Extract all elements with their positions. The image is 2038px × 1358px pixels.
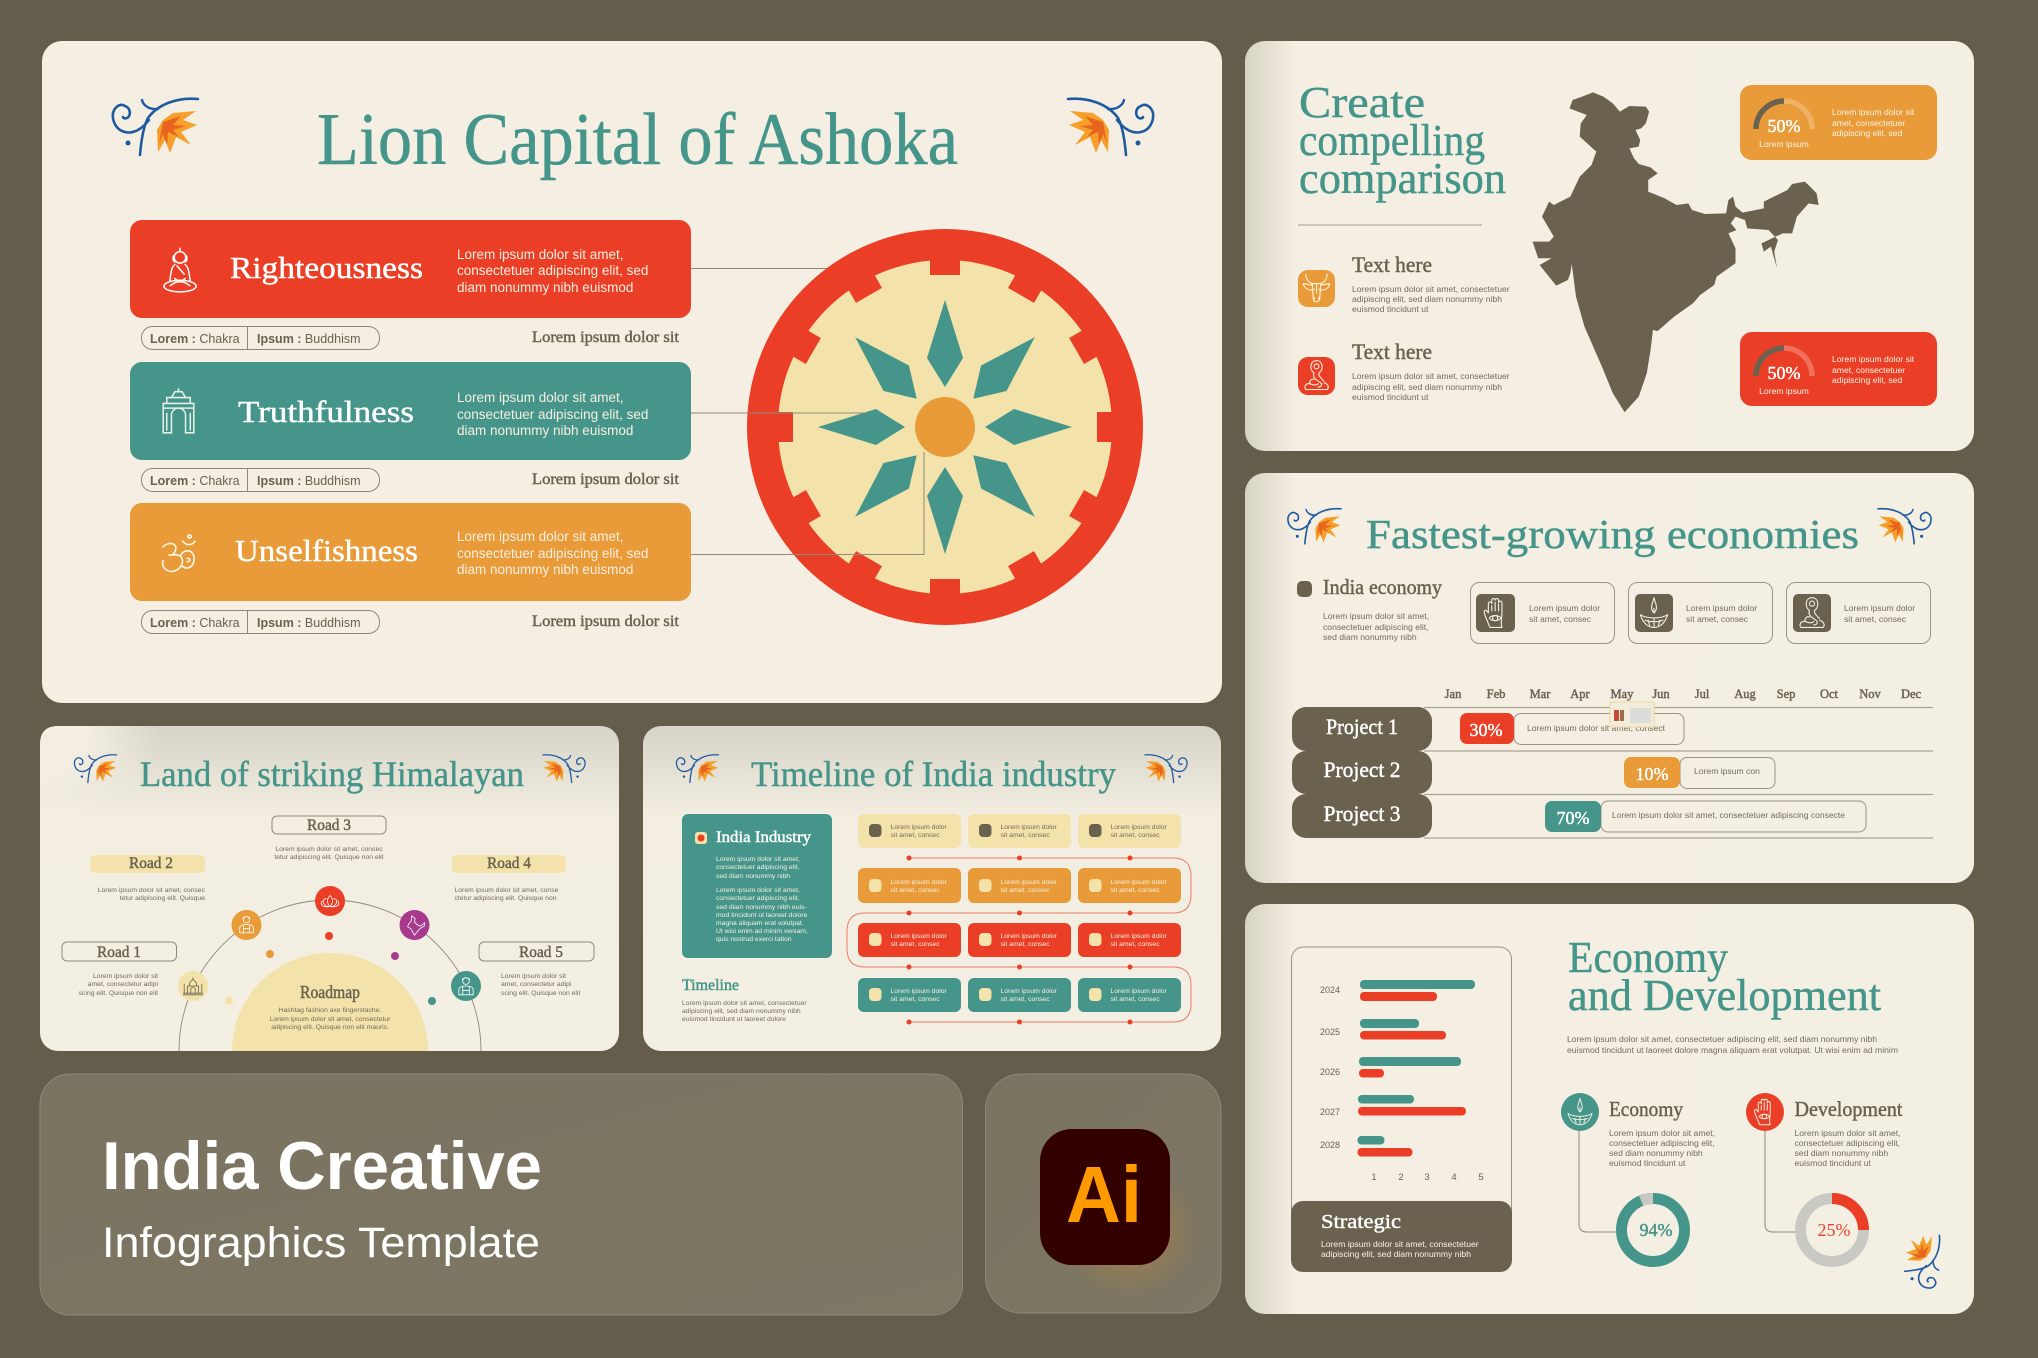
- card: cobra: sit amet, consec: [1844, 614, 1907, 624]
- economy block: Lorem ipsum dolor sit amet,: [1609, 1128, 1715, 1138]
- teal card: consectetuer adipiscing elit,: [716, 864, 800, 871]
- label: Road 5: amet, consectetur adipi: [501, 981, 572, 988]
- label: Road 4: [452, 855, 566, 902]
- heading: Create: [1299, 78, 1425, 127]
- gantt chart: [1292, 687, 1933, 838]
- bar: Truthfulness: consectetuer adipiscing elit, sed: [457, 407, 648, 422]
- bar chart card: Lorem ipsum dolor sit amet, consectetuer: [1321, 1239, 1479, 1249]
- panel: Economy and Development: [1245, 904, 1974, 1314]
- node: purple map: [400, 910, 430, 940]
- tag row 1: Ipsum : Buddhism: [257, 332, 361, 346]
- bar chart card: 2: [1398, 1172, 1404, 1183]
- teal card: Lorem ipsum dolor sit amet,: [716, 887, 800, 894]
- label: Road 3: Road 3: [307, 817, 351, 834]
- timeline row 1: Lorem ipsum dolor: [1110, 824, 1168, 831]
- teal card: sed diam nonummy nibh euis-: [716, 904, 807, 911]
- icon: left ornament: [676, 755, 718, 783]
- label: Road 4: Road 4: [487, 855, 531, 872]
- tag row 2: [142, 468, 680, 492]
- snake path: [847, 856, 1191, 1024]
- card: orange 50%: 50%: [1768, 116, 1800, 136]
- label: Road 2: [90, 855, 206, 902]
- teal card: India Industry: [716, 829, 811, 846]
- bar chart card: 1: [1371, 1172, 1377, 1183]
- label: Road 1: Road 1: [97, 944, 141, 961]
- teal card: [682, 814, 832, 958]
- gantt chart: 10%: [1636, 764, 1668, 784]
- timeline text: Timeline: [682, 977, 739, 994]
- timeline row 4: sit amet, consec: [1000, 996, 1050, 1003]
- tag row 3: Lorem : Chakra: [150, 616, 240, 630]
- timeline row 4: sit amet, consec: [890, 996, 940, 1003]
- bar: Righteousness: Righteousness: [230, 250, 423, 285]
- gantt chart: May: [1611, 687, 1634, 701]
- bar: Unselfishness: Lorem ipsum dolor sit amet,: [457, 529, 624, 544]
- gantt chart: Mar: [1530, 687, 1551, 701]
- timeline row 2: Lorem ipsum dolor: [1000, 879, 1058, 886]
- timeline row 2: Lorem ipsum dolor: [890, 879, 948, 886]
- card: red 50%: adipiscing elit, sed: [1832, 375, 1902, 385]
- panel: Land of striking Himalayan: [40, 726, 619, 1051]
- card: hand: Lorem ipsum dolor: [1529, 603, 1600, 613]
- item: cobra: euismod tincidunt ut: [1352, 392, 1429, 402]
- timeline row 1: Lorem ipsum dolor: [1000, 824, 1058, 831]
- heading: compelling: [1299, 116, 1485, 165]
- bar: Righteousness: Lorem ipsum dolor sit amet,: [457, 247, 624, 262]
- icon: left ornament: [74, 755, 116, 783]
- bar chart card: 2027: [1320, 1107, 1340, 1117]
- tag row 2: Ipsum : Buddhism: [257, 474, 361, 488]
- item: cow: adipiscing elit, sed diam nonummy nibh: [1352, 294, 1502, 304]
- node: orange person: [232, 910, 262, 940]
- connector lines: [1579, 1130, 1795, 1232]
- bar chart card: [1291, 947, 1512, 1272]
- card: diya: sit amet, consec: [1686, 614, 1749, 624]
- bar: Truthfulness: Truthfulness: [238, 394, 414, 429]
- label: Road 5: [479, 942, 594, 997]
- timeline row 1: sit amet, consec: [1110, 832, 1160, 839]
- economy block: consectetuer adipiscing elit,: [1609, 1138, 1715, 1148]
- timeline row 2: sit amet, consec: [1000, 887, 1050, 894]
- tag row 2: Lorem ipsum dolor sit: [532, 471, 680, 488]
- gantt chart: Project 1: [1326, 714, 1398, 739]
- icon: buddha: [164, 248, 196, 292]
- bar chart card: 5: [1478, 1172, 1484, 1183]
- development block: euismod tincidunt ut: [1794, 1158, 1872, 1168]
- map: India: [1533, 92, 1819, 412]
- tag row 1: [142, 326, 680, 350]
- label: Road 2: tetur adipiscing elit. Quisque: [120, 895, 205, 902]
- bar chart card: 2028: [1320, 1140, 1340, 1150]
- panel: Lion Capital of Ashoka: [42, 41, 1222, 703]
- timeline row 1: sit amet, consec: [890, 832, 940, 839]
- tag row 3: [142, 610, 680, 634]
- bar: Unselfishness: diam nonummy nibh euismod: [457, 562, 633, 577]
- label: Road 2: Lorem ipsum dolor sit amet, consec: [98, 887, 206, 894]
- tag row 1: Lorem : Chakra: [150, 332, 240, 346]
- gantt chart: Lorem ipsum con: [1694, 766, 1760, 776]
- teal card: magna aliquam erat volutpat.: [716, 920, 804, 927]
- card: orange 50%: Lorem ipsum dolor sit: [1832, 107, 1915, 117]
- India economy text: India economy: [1323, 575, 1442, 599]
- card: orange 50%: adipiscing elit, sed: [1832, 128, 1902, 138]
- bar: Unselfishness: [130, 503, 691, 601]
- timeline row 3: Lorem ipsum dolor: [1000, 933, 1058, 940]
- label: Road 3: [272, 816, 386, 861]
- timeline row 4: sit amet, consec: [1110, 996, 1160, 1003]
- item: cobra: Text here: [1352, 339, 1432, 364]
- card: orange 50%: amet, consectetuer: [1832, 118, 1905, 128]
- body text: Lorem ipsum dolor sit amet, consectetuer adipiscing elit, sed diam nonummy nibh: [1567, 1034, 1877, 1044]
- item: cobra: [1298, 339, 1510, 402]
- gantt chart: Oct: [1820, 687, 1839, 701]
- heading: [1568, 933, 1881, 1020]
- item: cobra: Lorem ipsum dolor sit amet, consectetuer: [1352, 371, 1510, 381]
- timeline row 2: sit amet, consec: [890, 887, 940, 894]
- heading: comparison: [1299, 154, 1506, 203]
- teal card: Lorem ipsum dolor sit amet,: [716, 856, 800, 863]
- card: red 50%: Lorem ipsum dolor sit: [1832, 354, 1915, 364]
- label: Road 5: Lorem ipsum dolor sit: [501, 973, 566, 980]
- icon: Ai logo: [1040, 1129, 1170, 1265]
- label: Road 5: scing elit. Quisque non elit: [501, 990, 580, 997]
- body text: euismod tincidunt ut laoreet dolore magna aliquam erat volutpat. Ut wisi enim ad minim: [1567, 1045, 1898, 1055]
- timeline row 3: sit amet, consec: [890, 941, 940, 948]
- card: hand: [1470, 582, 1614, 644]
- development block: Lorem ipsum dolor sit amet,: [1794, 1128, 1901, 1138]
- donut: 94%: 94%: [1640, 1220, 1672, 1240]
- economy block: sed diam nonummy nibh: [1609, 1148, 1703, 1158]
- timeline row 1: sit amet, consec: [1000, 832, 1050, 839]
- roadmap semicircle: adipiscing elit. Quisque non elit mauris.: [271, 1024, 389, 1031]
- timeline row 2: sit amet, consec: [1110, 887, 1160, 894]
- bar chart card: 2025: [1320, 1027, 1340, 1037]
- roadmap semicircle: Lorem ipsum dolor sit amet, consectetur: [270, 1016, 391, 1023]
- icon: corner ornament: [1905, 1235, 1940, 1288]
- card: cobra: Lorem ipsum dolor: [1844, 603, 1915, 613]
- icon: left ornament: [1288, 509, 1341, 544]
- gantt chart: Sep: [1777, 687, 1795, 701]
- roadmap semicircle: Hashtag fashion axe fingerstache.: [279, 1007, 381, 1014]
- bar chart card: 2026: [1320, 1067, 1340, 1077]
- card: red 50%: Lorem ipsum: [1759, 386, 1809, 396]
- gantt chart: Jun: [1652, 687, 1670, 701]
- heading: [1299, 78, 1506, 203]
- dots: [225, 932, 436, 1005]
- timeline row 2: [858, 868, 1181, 903]
- timeline row 4: Lorem ipsum dolor: [1000, 988, 1058, 995]
- icon: left ornament: [113, 99, 198, 155]
- timeline row 1: Lorem ipsum dolor: [890, 824, 948, 831]
- donut: 25%: 25%: [1818, 1220, 1850, 1240]
- node: red lotus: [315, 886, 345, 916]
- development block: consectetuer adipiscing elit,: [1794, 1138, 1900, 1148]
- bar chart card: 2024: [1320, 985, 1340, 995]
- title: Land of striking Himalayan: [140, 754, 524, 794]
- gantt chart: Feb: [1487, 687, 1505, 701]
- timeline row 4: [858, 978, 1181, 1012]
- India economy text: [1297, 575, 1442, 642]
- economy block: [1561, 1093, 1715, 1168]
- donut: 94%: [1622, 1198, 1684, 1262]
- gantt chart: 70%: [1556, 808, 1590, 828]
- card: orange 50%: Lorem ipsum: [1759, 139, 1809, 149]
- timeline row 4: Lorem ipsum dolor: [890, 988, 948, 995]
- tag row 2: Lorem : Chakra: [150, 474, 240, 488]
- title: Fastest-growing economies: [1366, 511, 1859, 557]
- roadmap semicircle: Roadmap: [300, 982, 360, 1002]
- item: cow: Text here: [1352, 252, 1432, 277]
- panel: Timeline of India industry: [643, 726, 1221, 1051]
- icon: right ornament: [543, 755, 585, 783]
- India economy text: consectetuer adipiscing elit,: [1323, 622, 1429, 632]
- timeline row 3: sit amet, consec: [1110, 941, 1160, 948]
- bar: Unselfishness: Unselfishness: [235, 533, 418, 568]
- card: hand: sit amet, consec: [1529, 614, 1592, 624]
- bar: Truthfulness: diam nonummy nibh euismod: [457, 423, 633, 438]
- bar: Righteousness: [130, 220, 691, 318]
- heading: India Creative: [102, 1128, 542, 1204]
- item: cobra: adipiscing elit, sed diam nonummy nibh: [1352, 382, 1502, 392]
- label: Road 3: Lorem ipsum dolor sit amet, consec: [275, 846, 383, 853]
- economy block: euismod tincidunt ut: [1609, 1158, 1686, 1168]
- gantt chart: Lorem ipsum dolor sit amet, consect: [1527, 723, 1666, 733]
- gantt chart: Jul: [1695, 687, 1710, 701]
- node: cream taj: [178, 971, 208, 1001]
- gantt chart: Jan: [1445, 687, 1462, 701]
- item: cow: [1298, 252, 1510, 314]
- heading: and Development: [1568, 971, 1881, 1020]
- label: Road 1: scing elit. Quisque non elit: [79, 990, 158, 997]
- bar: Unselfishness: consectetuer adipiscing elit, sed: [457, 546, 648, 561]
- icon: gate: [163, 388, 194, 433]
- connector lines: [691, 268, 924, 554]
- bar: Righteousness: diam nonummy nibh euismod: [457, 280, 633, 295]
- label: Road 5: Road 5: [519, 944, 563, 961]
- gantt chart: Lorem ipsum dolor sit amet, consectetuer adipiscing consecte: [1612, 810, 1845, 820]
- teal card: sed diam nonummy nibh: [716, 873, 790, 880]
- timeline row 3: Lorem ipsum dolor: [890, 933, 948, 940]
- icon: Ai logo: Ai: [1066, 1150, 1142, 1239]
- icon: right ornament: [1145, 755, 1187, 783]
- card: red 50%: [1740, 332, 1937, 406]
- gantt chart: Project 2: [1324, 757, 1400, 782]
- item: cow: Lorem ipsum dolor sit amet, consectetuer: [1352, 284, 1510, 294]
- card: orange 50%: [1740, 85, 1937, 160]
- node: teal person: [451, 971, 481, 1001]
- timeline row 2: Lorem ipsum dolor: [1110, 879, 1168, 886]
- icon: right ornament: [1068, 99, 1153, 155]
- card: diya: [1628, 582, 1772, 644]
- timeline text: [682, 977, 807, 1023]
- icon: om: [163, 535, 195, 571]
- title: Timeline of India industry: [751, 754, 1116, 794]
- label: Road 2: Road 2: [129, 855, 173, 872]
- panel: Fastest-growing economies: [1245, 473, 1974, 883]
- economy block: Economy: [1609, 1097, 1683, 1121]
- panel: India Creative title: [40, 1074, 962, 1315]
- development block: [1746, 1093, 1903, 1168]
- timeline row 3: [858, 923, 1181, 957]
- India economy text: Lorem ipsum dolor sit amet,: [1323, 611, 1429, 621]
- teal card: quis nostrud exerci tation: [716, 936, 792, 943]
- timeline row 3: sit amet, consec: [1000, 941, 1050, 948]
- label: Road 3: tetur adipiscing elit. Quisque non elit: [274, 854, 384, 861]
- bar chart card: 3: [1424, 1172, 1430, 1183]
- tag row 3: Ipsum : Buddhism: [257, 616, 361, 630]
- tag row 3: Lorem ipsum dolor sit: [532, 613, 680, 630]
- thumbnail artifact: [1610, 702, 1654, 727]
- gantt chart: Nov: [1859, 687, 1882, 701]
- card: cobra: [1786, 582, 1930, 644]
- gantt chart: 30%: [1470, 720, 1502, 740]
- India economy text: sed diam nonummy nibh: [1323, 632, 1417, 642]
- timeline row 4: Lorem ipsum dolor: [1110, 988, 1168, 995]
- timeline text: euismod tincidunt ut laoreet dolore: [682, 1016, 786, 1023]
- teal card: mod tincidunt ut laoreet dolore: [716, 912, 808, 919]
- development block: Development: [1794, 1097, 1903, 1121]
- timeline text: adipiscing elit, sed diam nonummy nibh: [682, 1008, 801, 1015]
- label: Road 4: Lorem ipsum dolor sit amet, conse: [454, 887, 559, 894]
- timeline row 3: Lorem ipsum dolor: [1110, 933, 1168, 940]
- bar: Truthfulness: Lorem ipsum dolor sit amet,: [457, 390, 624, 405]
- heading: Economy: [1568, 933, 1728, 982]
- roadmap semicircle: [232, 953, 428, 1051]
- gantt chart: Project 3: [1324, 801, 1400, 826]
- subheading: Infographics Template: [102, 1219, 540, 1267]
- card: diya: Lorem ipsum dolor: [1686, 603, 1757, 613]
- label: Road 4: ctetur adipiscing elit. Quisque non: [454, 895, 557, 902]
- bar chart card: 4: [1451, 1172, 1457, 1183]
- gantt chart: Aug: [1734, 687, 1757, 701]
- gantt chart: Dec: [1901, 687, 1922, 701]
- bar: Righteousness: consectetuer adipiscing elit, sed: [457, 263, 648, 278]
- label: Road 1: amet, consectetur adipi: [88, 981, 158, 988]
- gantt chart: Apr: [1570, 687, 1591, 701]
- panel: Illustrator badge: [986, 1074, 1221, 1313]
- panel: Create compelling comparison: [1245, 41, 1974, 451]
- bar chart card: Strategic: [1321, 1211, 1401, 1233]
- teal card: consectetuer adipiscing elit,: [716, 895, 800, 902]
- label: Road 1: [62, 942, 176, 997]
- development block: sed diam nonummy nibh: [1794, 1148, 1888, 1158]
- donut: 25%: [1800, 1198, 1864, 1262]
- bar: Truthfulness: [130, 362, 691, 460]
- chart: chakra wheel: [747, 229, 1143, 625]
- timeline text: Lorem ipsum dolor sit amet, consectetuer: [682, 1000, 807, 1007]
- timeline row 1: [858, 814, 1181, 848]
- roadmap arc: [179, 900, 481, 1051]
- card: red 50%: amet, consectetuer: [1832, 365, 1905, 375]
- item: cow: euismod tincidunt ut: [1352, 304, 1429, 314]
- body text: [1567, 1034, 1898, 1055]
- label: Road 1: Lorem ipsum dolor sit: [93, 973, 158, 980]
- card: red 50%: 50%: [1768, 363, 1800, 383]
- title: Lion Capital of Ashoka: [317, 99, 958, 181]
- tag row 1: Lorem ipsum dolor sit: [532, 329, 680, 346]
- icon: right ornament: [1878, 509, 1931, 544]
- bar chart card: adipiscing elit, sed diam nonummy nibh: [1321, 1249, 1471, 1259]
- teal card: Ut wisi enim ad minim veniam,: [716, 928, 808, 935]
